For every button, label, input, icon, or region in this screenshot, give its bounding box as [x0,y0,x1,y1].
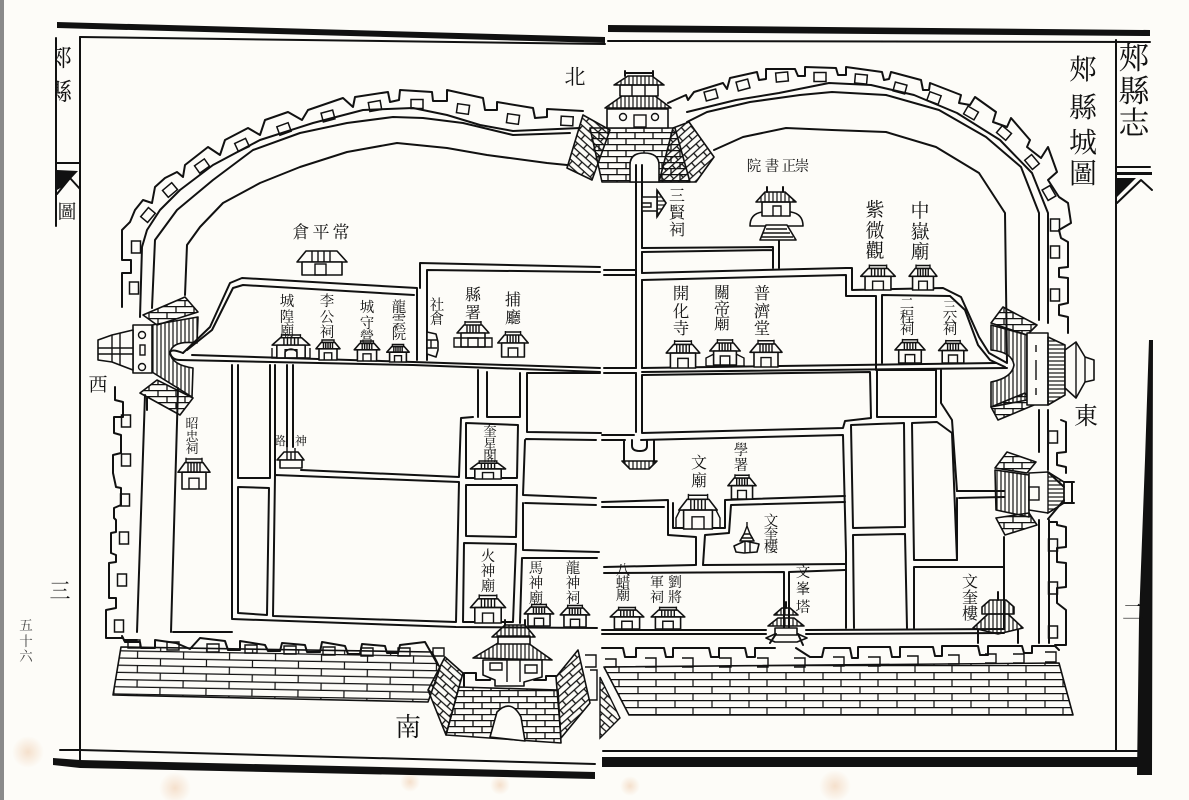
building: 三公祠: 三公祠 [943,299,958,338]
west gate [98,297,198,415]
south gate [428,620,597,743]
gate wings and base [567,115,610,180]
building: 城隍廟 [272,293,310,358]
south wall: left segment [113,636,444,702]
building: 社倉: 社倉 [430,297,445,328]
building: 崇正書院 [747,158,809,240]
running head: 郟縣志 [1118,41,1150,141]
direction labels: 北 [564,65,586,89]
building: 中嶽廟 [909,200,937,290]
building: 縣署: 縣署 [465,286,482,322]
building: 開化寺 [666,284,700,368]
building: 八蜡廟 [610,563,644,629]
direction labels: 西 [88,374,108,396]
direction labels: 東 [1074,403,1098,430]
gate tower [605,71,671,128]
building: 文廟 [676,454,720,529]
building: 文峯塔 pagoda [766,564,811,645]
fish-tail mark: right [1117,172,1152,203]
building: 城隍廟: 城隍廟 [280,293,295,340]
building: 開化寺: 開化寺 [673,284,689,338]
small north gate stub in town center [622,440,657,469]
building: 昭忠祠 [178,416,210,489]
building: 文廟: 文廟 [691,454,707,490]
building: 劉將軍祠 [650,575,685,629]
building: 八蜡廟: 八蜡廟 [616,563,631,604]
building: 神路 shrine: 路神 [274,433,307,448]
fish-tail mark: left [57,170,80,194]
direction labels [88,65,1098,742]
building: 三賢祠: 三賢祠 [669,187,687,239]
building: 李公祠 [316,292,340,360]
north gate [567,71,714,182]
building: 捕廳: 捕廳 [505,291,522,327]
building: 紫微觀 [861,199,895,290]
building: 龍神祠: 龍神祠 [566,560,581,607]
building: 三賢祠 [642,187,687,239]
building: 普濟堂: 普濟堂 [754,284,770,338]
margin text: left column: 圖 [57,201,77,223]
title: 郟縣城圖 [1069,54,1098,190]
building: 奎星閣 [470,424,506,479]
building: 捕廳 [498,291,528,357]
building: 劉將軍祠: 劉將 [668,575,682,606]
left page edge [0,0,4,800]
building: 社倉 [427,297,445,357]
margin text: left column: 三 [50,579,70,603]
building: 昭忠祠: 昭忠祠 [185,416,199,456]
building: 文奎樓 pagoda: 文奎樓 [764,513,779,556]
margin page number: 五十六 [19,618,33,664]
building: 二程祠: 二程祠 [900,297,915,338]
right margin numeral: 二 [1122,600,1144,625]
building: 城守營 [354,299,380,361]
building: 城守營: 城守營 [360,299,375,346]
building: 關帝廟: 關帝廟 [714,284,730,333]
building: 龍雲院: 龍雲院 [392,299,407,343]
building: 火神廟 [470,548,506,623]
building: 神路 shrine [274,433,307,468]
building: 奎星閣: 奎星閣 [483,424,497,464]
city wall: inner rampart lines [124,83,1049,643]
building: 三公祠 [939,299,967,363]
cover for clipped margin text [36,40,55,120]
building: 火神廟: 火神廟 [481,548,495,595]
building: 馬神廟 [524,560,554,626]
building: 李公祠: 李公祠 [320,292,335,341]
building: 常平倉 [292,223,350,275]
gate tower [473,620,552,686]
building: 中嶽廟: 中嶽廟 [910,200,930,263]
south wall: right segment [600,646,1073,738]
street network [180,170,1007,634]
building: 普濟堂 [750,284,782,367]
building: 文峯塔 pagoda: 文峯塔 [796,564,811,616]
building: 龍雲院 [387,299,409,362]
building: 學署 [728,442,756,499]
building: 紫微觀: 紫微觀 [865,199,885,262]
building: 常平倉: 倉平常 [292,223,350,242]
building: 劉將軍祠: 軍祠 [650,575,664,606]
building: 文奎樓 pavilion [962,573,1023,643]
building: 文奎樓 pagoda [734,513,779,556]
margin text: left column: 郟縣 [48,45,73,106]
building: 文奎樓 pavilion: 文奎樓 [962,573,979,623]
east gate [991,307,1094,420]
margin text: left column [48,45,77,603]
lower east gate [995,452,1074,535]
building: 馬神廟: 馬神廟 [529,560,543,607]
building: 二程祠 [895,297,925,363]
paper stains [12,736,851,800]
direction labels: 南 [395,713,421,742]
building: 崇正書院: 院書正崇 [747,158,809,175]
building: 學署: 學署 [734,442,748,474]
building: 縣署 [454,286,492,347]
city wall: battlements [106,67,1071,645]
building: 關帝廟 [706,284,745,366]
building: 龍神祠 [560,560,590,627]
